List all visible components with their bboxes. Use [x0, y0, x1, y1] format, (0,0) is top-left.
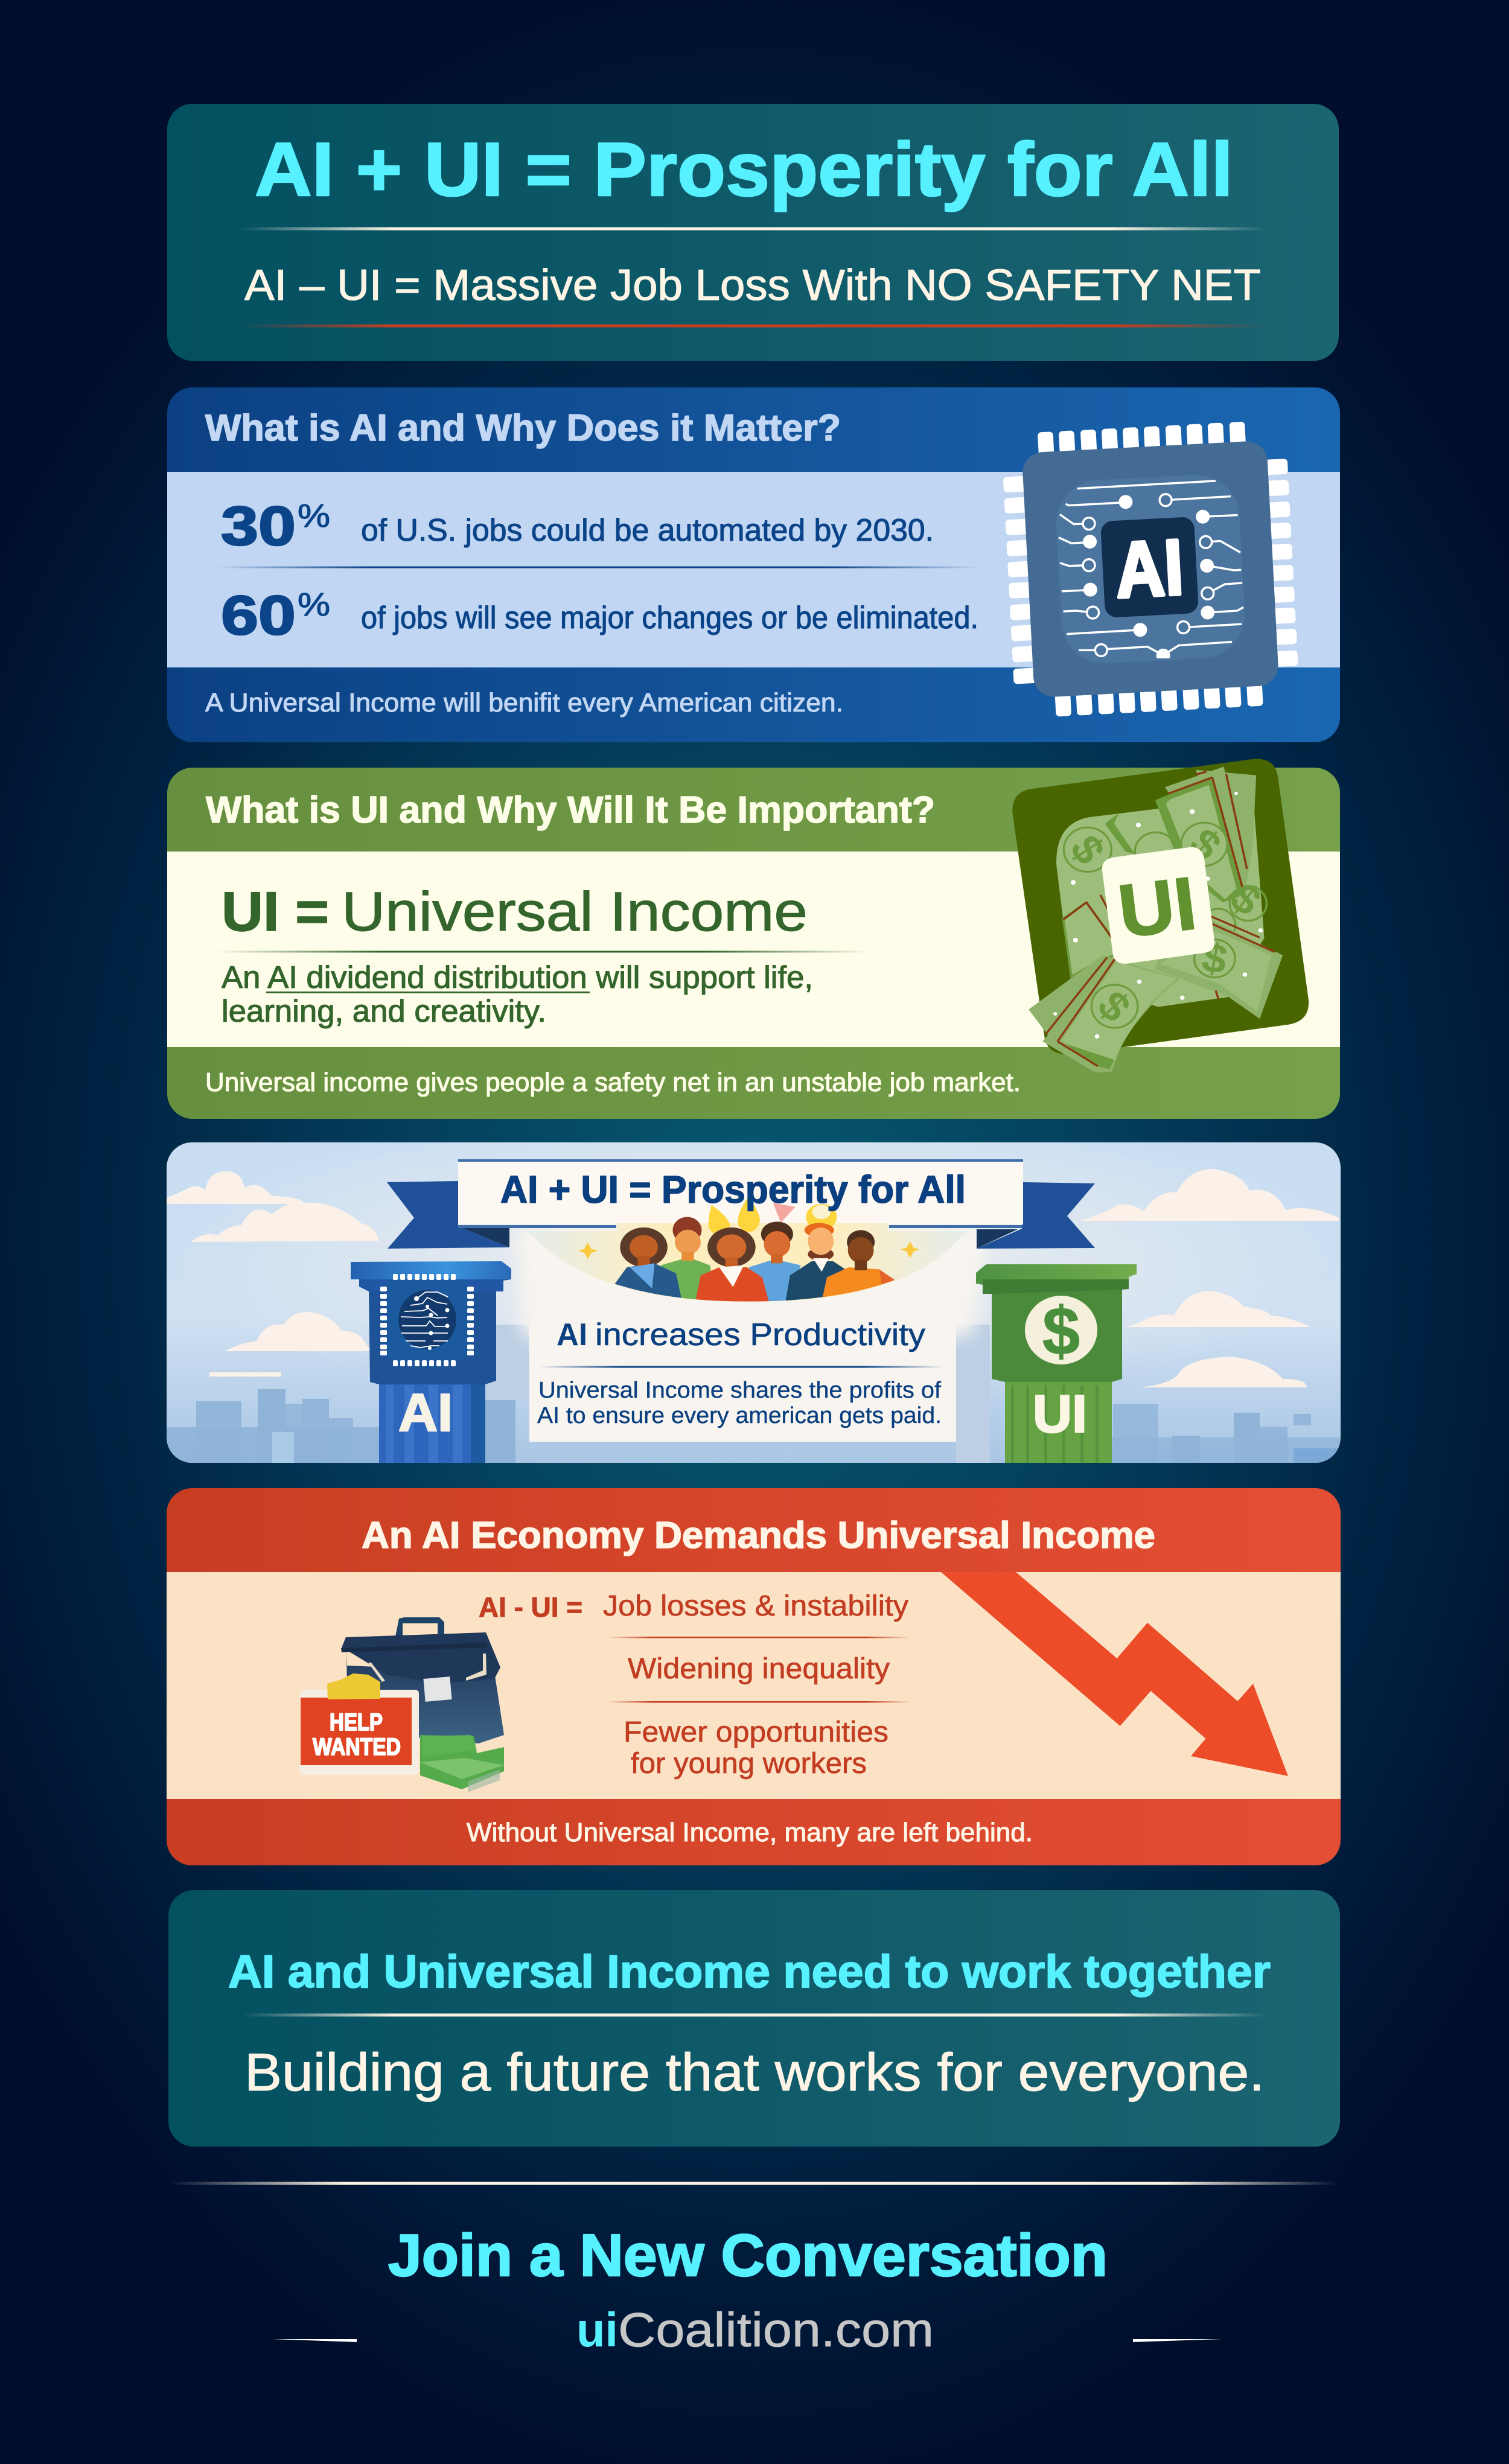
skyline — [167, 1389, 1341, 1464]
clouds — [167, 1169, 1339, 1387]
list: consequences: Widening inequality — [628, 1653, 890, 1685]
website: Coalition.com — [618, 2303, 934, 2357]
text: AI dividend description: learning, and creativity. — [222, 994, 546, 1029]
heading: what is UI: What is UI and Why Will It Be Important? — [206, 789, 935, 831]
ribbon: right — [977, 1182, 1095, 1249]
icon: UI money: $ — [1222, 874, 1270, 925]
heading: work together: AI and Universal Income need to work together — [228, 1946, 1271, 1998]
icon: AI chip small — [380, 1274, 474, 1366]
icon: UI money: UI — [1114, 862, 1201, 953]
icon: AI chip — [1001, 419, 1300, 719]
heading: what is AI: What is AI and Why Does it Matter? — [205, 407, 841, 449]
list: consequences: AI - UI = — [479, 1591, 582, 1623]
panel: AI economy — [167, 1488, 1341, 1865]
panel: AI + UI illustration — [167, 1142, 1341, 1464]
text: AI dividend description: An AI dividend distribution will support life, — [222, 960, 813, 995]
ribbon: left — [387, 1181, 509, 1249]
banner title: AI + UI = Prosperity for All — [500, 1168, 966, 1211]
text: universal income shares — [537, 1378, 942, 1428]
footer text: universal income benefit: A Universal Income will benifit every American citizen. — [205, 688, 843, 718]
list: consequences: for young workers — [631, 1748, 867, 1780]
stat: 30 percent — [221, 495, 934, 557]
icon: briefcase and help wanted sign — [300, 1617, 504, 1792]
text: AI dividend description — [222, 960, 813, 1029]
subtitle: AI – UI = Massive Job Loss With NO SAFETY NET — [244, 261, 1261, 310]
person 5 — [785, 1223, 846, 1302]
arrow: falling — [941, 1572, 1288, 1776]
icon: UI money: $ — [1061, 827, 1115, 872]
person 3 — [695, 1227, 769, 1302]
stat: 60 percent: 60 — [221, 585, 296, 646]
column: UI — [976, 1264, 1137, 1463]
person 6 — [821, 1230, 898, 1302]
icon: UI money: $ — [1181, 819, 1231, 869]
icon: UI money: $ — [1088, 982, 1140, 1030]
list: consequences: Job losses & instability — [603, 1590, 908, 1622]
heading: AI increases productivity: increases Productivity — [595, 1317, 925, 1352]
column: UI: UI — [1033, 1384, 1087, 1444]
stars — [578, 1241, 919, 1259]
heading: AI economy: An AI Economy Demands Universal Income — [362, 1515, 1155, 1556]
panel: closing message — [168, 1890, 1340, 2147]
balloons — [709, 1197, 837, 1235]
icon: UI money — [1012, 759, 1309, 1072]
person 4 — [748, 1221, 801, 1302]
banner — [458, 1159, 1023, 1228]
icon: UI money: $ — [1198, 934, 1231, 983]
icon: dollar coin — [1025, 1293, 1097, 1369]
icon: briefcase and help wanted sign: WANTED — [313, 1734, 401, 1760]
call to action: Join a New Conversation — [388, 2222, 1108, 2288]
stat: 30 percent: 30 — [221, 495, 296, 557]
column: AI: AI — [398, 1383, 453, 1442]
stat: 60 percent — [221, 585, 978, 646]
title: AI + UI = Prosperity for All — [255, 127, 1233, 212]
list: consequences: Fewer opportunities — [624, 1716, 888, 1748]
footer text: safety net: Universal income gives people a safety net in an unstable job market. — [205, 1068, 1021, 1097]
website: ui — [576, 2303, 618, 2357]
icon: briefcase and help wanted sign: HELP — [330, 1709, 383, 1736]
panel: what is UI — [167, 768, 1340, 1119]
footer — [169, 2182, 1340, 2357]
illustration: people — [578, 1197, 919, 1302]
person 2 — [661, 1217, 716, 1302]
footer text: left behind: Without Universal Income, many are left behind. — [467, 1818, 1033, 1847]
panel: title — [167, 104, 1339, 361]
icon: dollar coin: $ — [1042, 1293, 1080, 1369]
person 1 — [613, 1227, 681, 1299]
text: universal income shares: AI to ensure every american gets paid. — [537, 1403, 942, 1428]
stat: 30 percent: % — [298, 498, 330, 534]
column: AI — [351, 1261, 511, 1463]
panel: what is AI — [167, 387, 1340, 742]
text: universal income shares: Universal Income shares the profits of — [538, 1378, 941, 1403]
definition: UI = Universal Income: Universal Income — [342, 881, 808, 943]
stat: 30 percent: of U.S. jobs could be automated by 2030. — [361, 513, 934, 548]
definition: UI = Universal Income: UI = — [222, 881, 329, 943]
stat: 60 percent: of jobs will see major changes or be eliminated. — [361, 600, 978, 635]
text: building a future: Building a future that works for everyone. — [244, 2042, 1265, 2102]
list: consequences — [479, 1590, 911, 1780]
center card — [516, 1225, 990, 1442]
heading: AI increases productivity: AI — [557, 1317, 587, 1352]
stat: 60 percent: % — [298, 587, 330, 623]
dome background — [528, 1223, 966, 1302]
icon: AI chip: AI — [1113, 523, 1185, 614]
